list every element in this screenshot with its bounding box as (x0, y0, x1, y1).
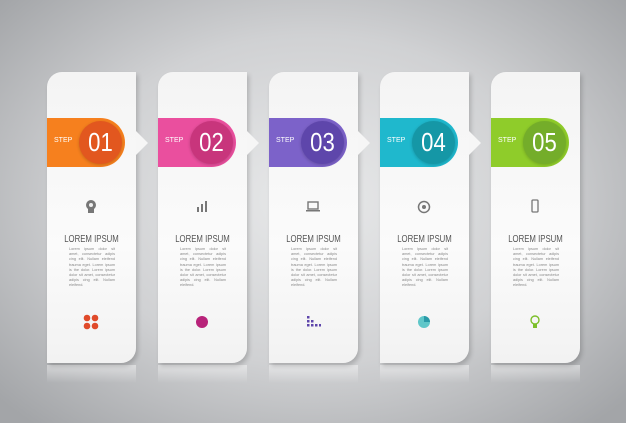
band: step 05 (491, 118, 569, 167)
icon: laptop (306, 201, 320, 212)
band: step 05: STEP (498, 137, 516, 144)
arrow 1 (136, 131, 148, 155)
band: step 04: STEP (387, 137, 405, 144)
icon: chart (197, 201, 207, 212)
icon: pie (418, 316, 430, 328)
text 1: Lorem ipsum dolor sit amet, consectetur adipis cing elit. Nullam eleifend trauma eget. Lorem ipsum is the dolor. Lorem ipsum dolor sit amet, consectetur adipis cing elit. Nullam eleifend. (69, 247, 115, 287)
card 3 (269, 72, 370, 376)
card 4 (380, 72, 481, 378)
icon: circles (84, 314, 98, 330)
heading 1: LOREM IPSUM (64, 234, 119, 245)
band: step 02: 02 (199, 127, 224, 157)
text 2: Lorem ipsum dolor sit amet, consectetur adipis cing elit. Nullam eleifend trauma eget. Lorem ipsum is the dolor. Lorem ipsum dolor sit amet, consectetur adipis cing elit. Nullam eleifend. (180, 247, 226, 287)
band: step 04 (380, 118, 458, 167)
icon: dots (307, 316, 321, 326)
band: step 03: 03 (310, 127, 335, 157)
icon: bulb (530, 315, 540, 328)
heading 5: LOREM IPSUM (508, 234, 563, 245)
heading 4: LOREM IPSUM (397, 234, 452, 245)
band: step 02: STEP (165, 137, 183, 144)
icon: target (418, 200, 430, 214)
text 3: Lorem ipsum dolor sit amet, consectetur adipis cing elit. Nullam eleifend trauma eget. Lorem ipsum is the dolor. Lorem ipsum dolor sit amet, consectetur adipis cing elit. Nullam eleifend. (291, 247, 337, 287)
band: step 01 (47, 118, 125, 167)
arrow 3 (358, 131, 370, 155)
band: step 02 (158, 118, 236, 167)
heading 2: LOREM IPSUM (175, 234, 230, 245)
card 1 (47, 72, 148, 378)
arrow 2 (247, 131, 259, 155)
text 4: Lorem ipsum dolor sit amet, consectetur adipis cing elit. Nullam eleifend trauma eget. Lorem ipsum is the dolor. Lorem ipsum dolor sit amet, consectetur adipis cing elit. Nullam eleifend. (402, 247, 448, 287)
text 5: Lorem ipsum dolor sit amet, consectetur adipis cing elit. Nullam eleifend trauma eget. Lorem ipsum is the dolor. Lorem ipsum dolor sit amet, consectetur adipis cing elit. Nullam eleifend. (513, 247, 559, 287)
band: step 03 (269, 118, 347, 167)
icon: phone (531, 199, 539, 213)
card 5 (491, 72, 584, 378)
card 2 (158, 72, 259, 378)
band: step 03: STEP (276, 137, 294, 144)
band: step 01: STEP (54, 137, 72, 144)
band: step 04: 04 (421, 127, 446, 157)
icon: pie (196, 316, 208, 328)
arrow 4 (469, 131, 481, 155)
heading 3: LOREM IPSUM (286, 234, 341, 245)
band: step 01: 01 (88, 127, 113, 157)
band: step 05: 05 (532, 127, 557, 157)
icon: head (86, 200, 96, 213)
